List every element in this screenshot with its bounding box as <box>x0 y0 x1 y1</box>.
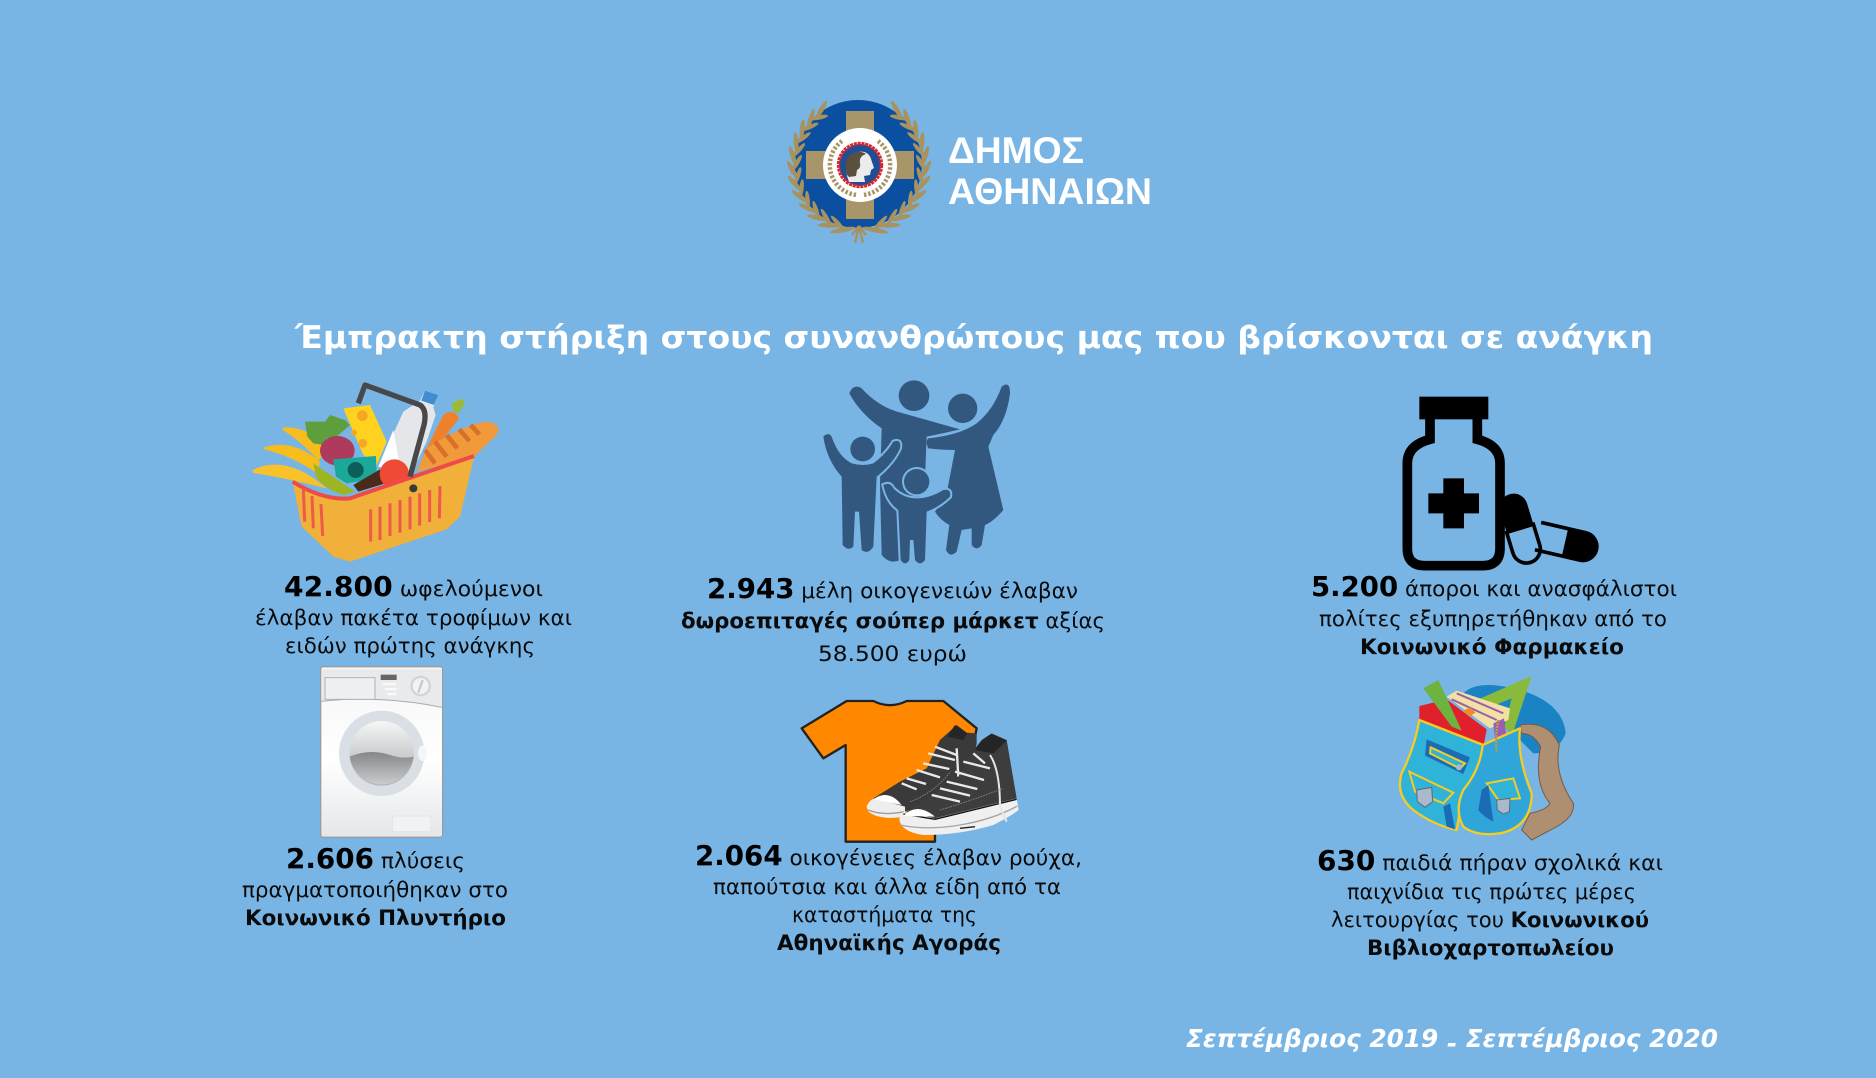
icon: t-shirt and sneakers <box>802 701 1019 842</box>
text: clothes and shoes: Αθηναϊκής Αγοράς <box>777 931 1001 956</box>
logo wordmark <box>948 130 1152 212</box>
footer date range: Σεπτέμβριος 2020 <box>1457 1024 1718 1053</box>
text: clothes and shoes: 2.064 οικογένειες έλαβαν ρούχα, <box>695 840 1082 872</box>
panel: social laundry <box>242 667 508 931</box>
footer date range: - <box>1447 1029 1457 1058</box>
text: social laundry: Κοινωνικό Πλυντήριο <box>245 906 506 931</box>
icon: shopping basket <box>253 385 498 562</box>
text: social pharmacy: Κοινωνικό Φαρμακείο <box>1360 635 1624 660</box>
text: food parcels: 42.800 ωφελούμενοι <box>284 571 543 603</box>
text: social bookshop: 630 παιδιά πήραν σχολικά και <box>1317 845 1663 877</box>
text: supermarket vouchers: 58.500 ευρώ <box>818 642 967 667</box>
icon: orange t-shirt <box>802 701 977 842</box>
text: social pharmacy: 5.200 άποροι και ανασφάλιστοι <box>1311 571 1677 603</box>
text: supermarket vouchers <box>681 573 1105 667</box>
text: social bookshop: Βιβλιοχαρτοπωλείου <box>1367 936 1614 961</box>
logo wordmark: ΔΗΜΟΣ <box>948 130 1084 171</box>
text: food parcels: έλαβαν πακέτα τροφίμων και <box>255 606 572 631</box>
text: social bookshop: λειτουργίας του Κοινωνικού <box>1331 908 1649 933</box>
panel: supermarket vouchers <box>681 380 1105 667</box>
text: social laundry: 2.606 πλύσεις <box>286 843 465 875</box>
icon: sneakers <box>867 725 1019 835</box>
text: clothes and shoes: καταστήματα της <box>792 903 977 928</box>
panel: food parcels <box>253 385 572 659</box>
text: social laundry: πραγματοποιήθηκαν στο <box>242 878 508 903</box>
title: Έμπρακτη στήριξη στους συνανθρώπους μας που βρίσκονται σε ανάγκη <box>294 320 1653 356</box>
icon: municipal emblem <box>785 100 933 243</box>
text: food parcels: ειδών πρώτης ανάγκης <box>285 634 535 659</box>
panel: social bookshop <box>1317 676 1663 961</box>
text: supermarket vouchers: δωροεπιταγές σούπερ μάρκετ αξίας <box>681 609 1105 634</box>
text: social bookshop: παιχνίδια τις πρώτες μέρες <box>1347 880 1636 905</box>
text: clothes and shoes <box>695 840 1082 956</box>
text: social bookshop <box>1317 845 1663 961</box>
text: social pharmacy: πολίτες εξυπηρετήθηκαν από το <box>1319 607 1667 632</box>
footer date range: Σεπτέμβριος 2019 <box>1186 1024 1441 1053</box>
text: clothes and shoes: παπούτσια και άλλα είδη από τα <box>713 875 1061 900</box>
panel: clothes and shoes <box>695 701 1082 956</box>
icon: washing machine <box>321 667 443 837</box>
icon: school backpack <box>1400 676 1573 840</box>
text: food parcels <box>255 571 572 659</box>
panel: social pharmacy <box>1311 397 1677 660</box>
text: social laundry <box>242 843 508 931</box>
icon: family silhouette <box>823 380 1010 563</box>
logo wordmark: ΑΘΗΝΑΙΩΝ <box>948 171 1152 212</box>
text: supermarket vouchers: 2.943 μέλη οικογενειών έλαβαν <box>707 573 1078 605</box>
icon: medicine bottle and capsules <box>1407 397 1600 567</box>
text: social pharmacy <box>1311 571 1677 660</box>
header logo: Municipality of Athens <box>785 100 1152 243</box>
